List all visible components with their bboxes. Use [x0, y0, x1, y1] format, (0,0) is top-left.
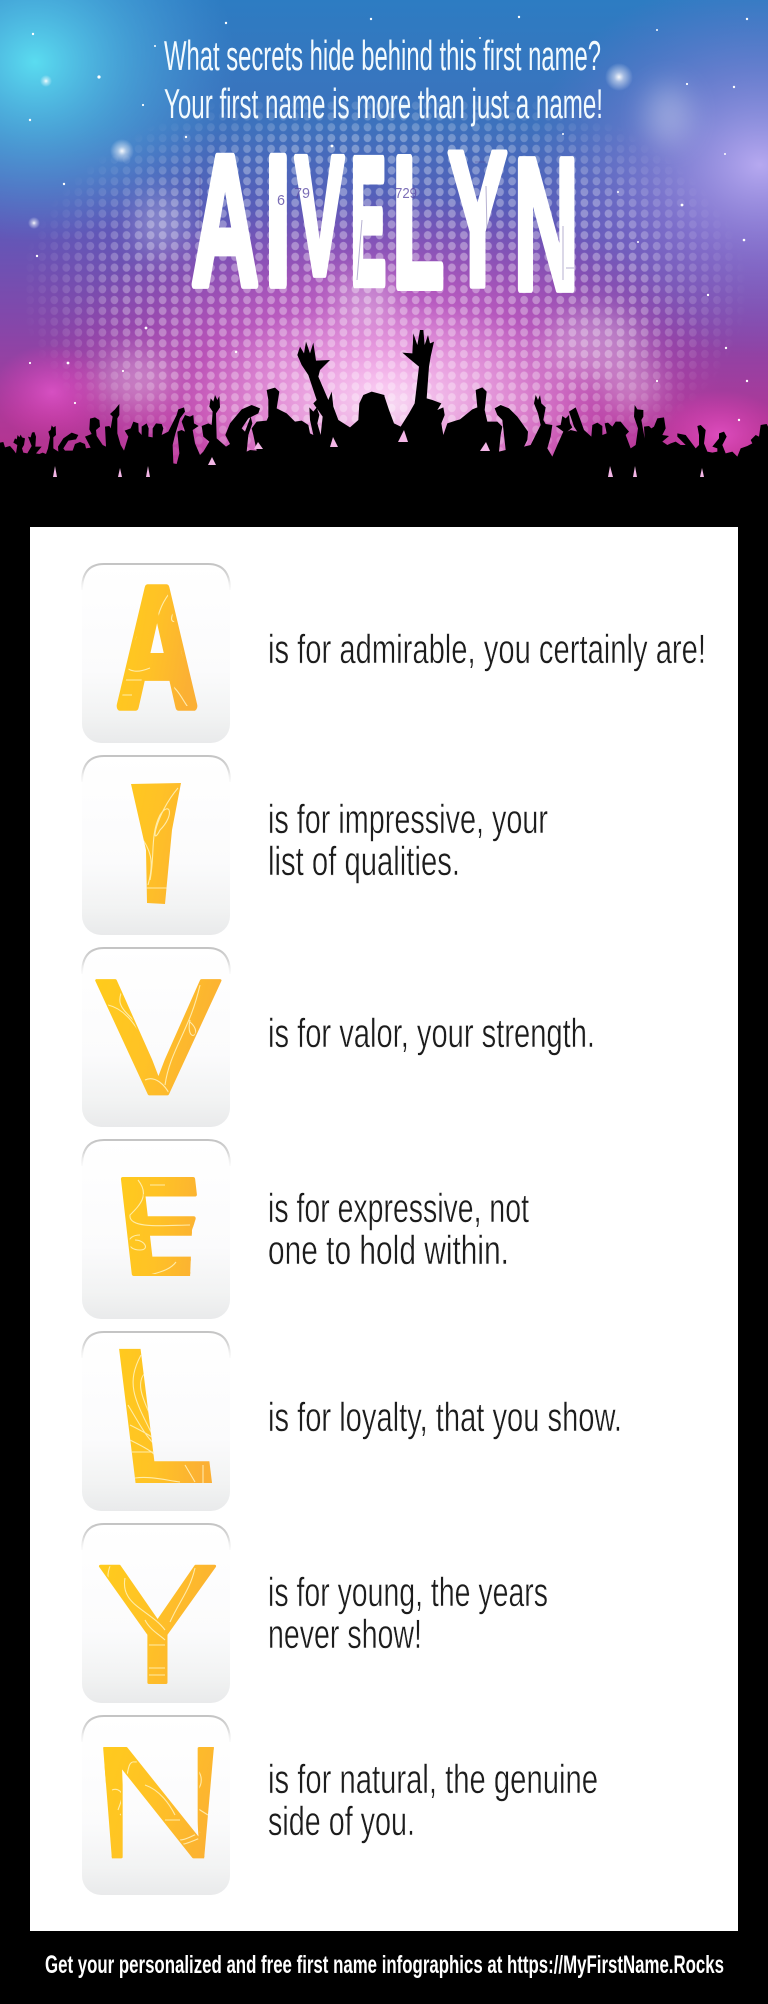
letter N: N [88, 1715, 232, 1891]
letter I [131, 783, 181, 904]
statement: is for expressive, not [268, 1185, 529, 1231]
letter A [116, 584, 198, 711]
statement: is for young, the years [268, 1569, 548, 1615]
letter V [95, 979, 222, 1096]
name title: AIVELYN: V [295, 121, 344, 310]
tile [82, 1331, 230, 1511]
row 5: letter L [82, 1306, 622, 1524]
name title: AIVELYN: Y [448, 111, 508, 327]
letter E [120, 1177, 197, 1276]
letter A: A [117, 553, 197, 743]
tile [82, 1523, 230, 1703]
row 2: letter I [82, 745, 548, 942]
row 7: letter N [82, 1715, 598, 1895]
tile [82, 1139, 230, 1319]
tile [82, 1715, 230, 1895]
letter N [103, 1747, 214, 1858]
letter I: I [106, 745, 206, 942]
letter L: L [104, 1306, 222, 1524]
letter Y: Y [96, 1531, 219, 1719]
name title: AIVELYN: A [192, 118, 259, 325]
header: concert backdrop [0, 0, 768, 464]
statement: is for impressive, your [268, 796, 548, 842]
tagline [164, 32, 603, 127]
name title: AIVELYN [192, 111, 579, 330]
statement line 2: list of qualities. [268, 838, 460, 884]
statement: is for loyalty, that you show. [268, 1394, 622, 1440]
letter L [119, 1348, 212, 1483]
white content panel [30, 527, 738, 1931]
tile [82, 947, 230, 1127]
row 6: letter Y [82, 1523, 548, 1719]
stars [29, 16, 748, 421]
statement: is for valor, your strength. [268, 1010, 595, 1056]
statement line 2: one to hold within. [268, 1227, 509, 1273]
row 1: letter A [82, 553, 706, 743]
row 4: letter E [82, 1139, 529, 1319]
statement line 2: side of you. [268, 1798, 415, 1844]
name title: AIVELYN: 79 [294, 185, 310, 202]
statement: is for natural, the genuine [268, 1756, 598, 1802]
statement line 2: never show! [268, 1611, 422, 1657]
star flares [28, 63, 633, 229]
letter V: V [96, 945, 221, 1130]
name title: AIVELYN: E [351, 122, 386, 323]
name title: AIVELYN: L [393, 118, 444, 326]
name title: AIVELYN: 6 [277, 192, 285, 209]
name title: AIVELYN: 729 [395, 185, 417, 202]
name title: AIVELYN: I [265, 118, 291, 325]
light gaps between crowd figures [53, 430, 704, 477]
letter Y [98, 1564, 216, 1684]
letter E: E [111, 1149, 215, 1304]
name title: AIVELYN: N [514, 121, 579, 330]
tile [82, 563, 230, 743]
row 3: letter V [82, 945, 595, 1130]
crowd silhouette [0, 330, 768, 528]
tile [82, 755, 230, 935]
